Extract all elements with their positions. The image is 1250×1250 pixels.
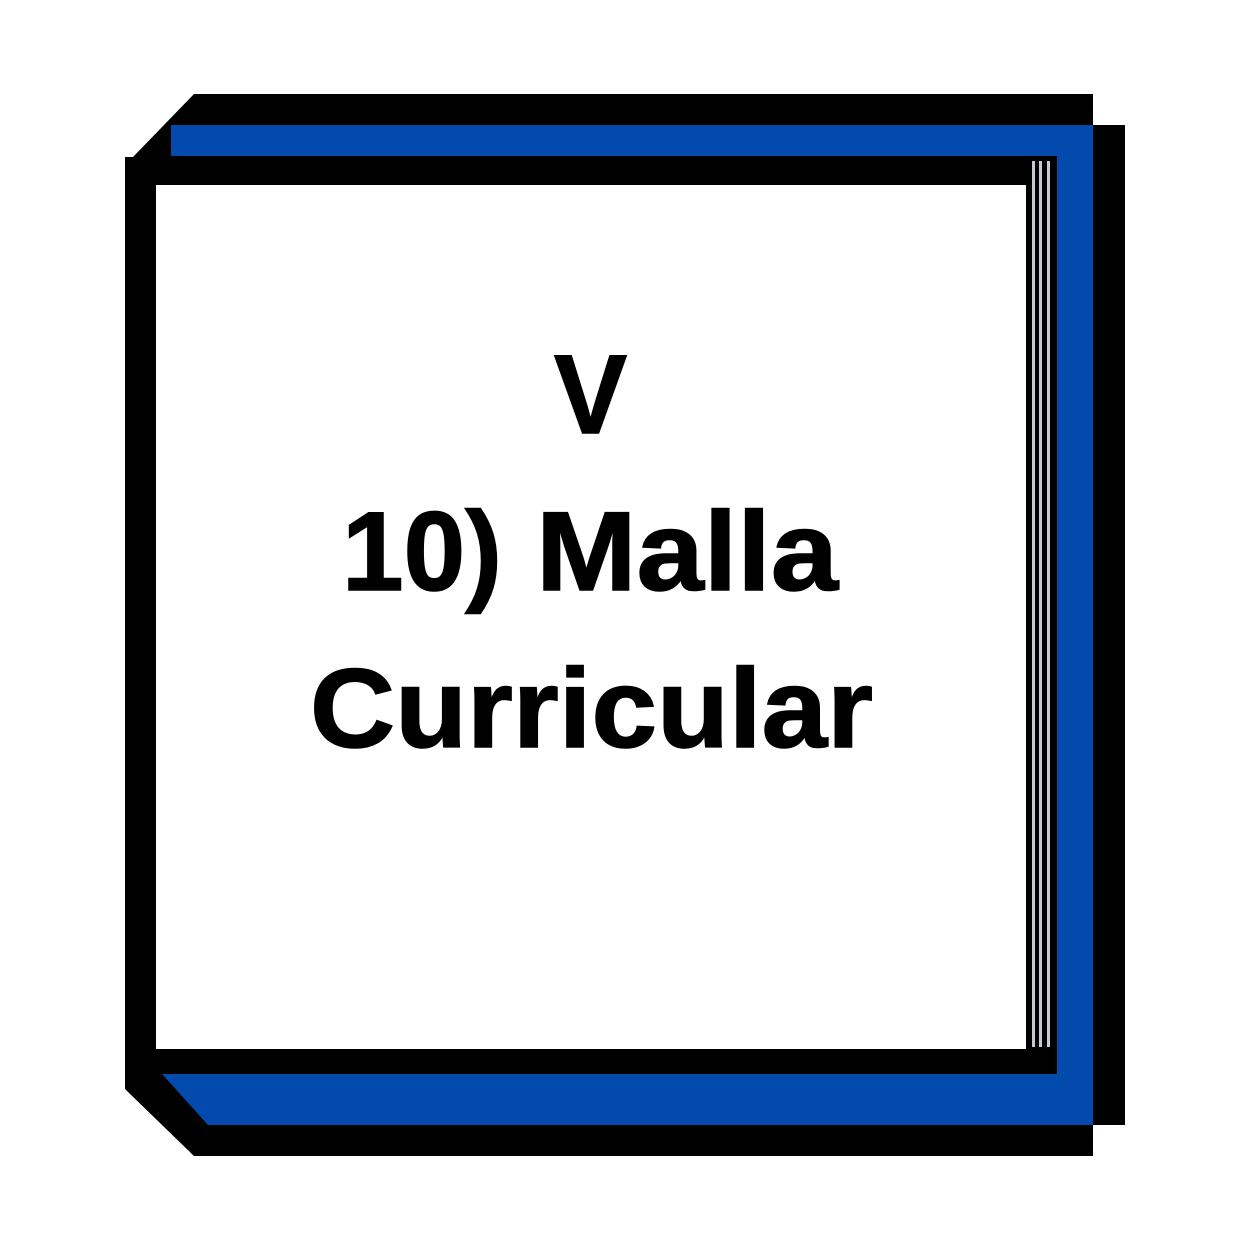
title text [310, 332, 873, 771]
page stripes [1032, 161, 1050, 1047]
line: V: V [554, 332, 627, 457]
line: 10) Malla: Malla [536, 489, 839, 614]
line: 10) Malla: 10) [342, 489, 502, 614]
line: Curricular: Curricular [310, 646, 873, 771]
line: 10) Malla [342, 489, 839, 614]
blue book band [162, 125, 1093, 1125]
left spine edge [125, 157, 156, 1089]
white page [156, 185, 1026, 1049]
book outer black cover [125, 94, 1125, 1156]
